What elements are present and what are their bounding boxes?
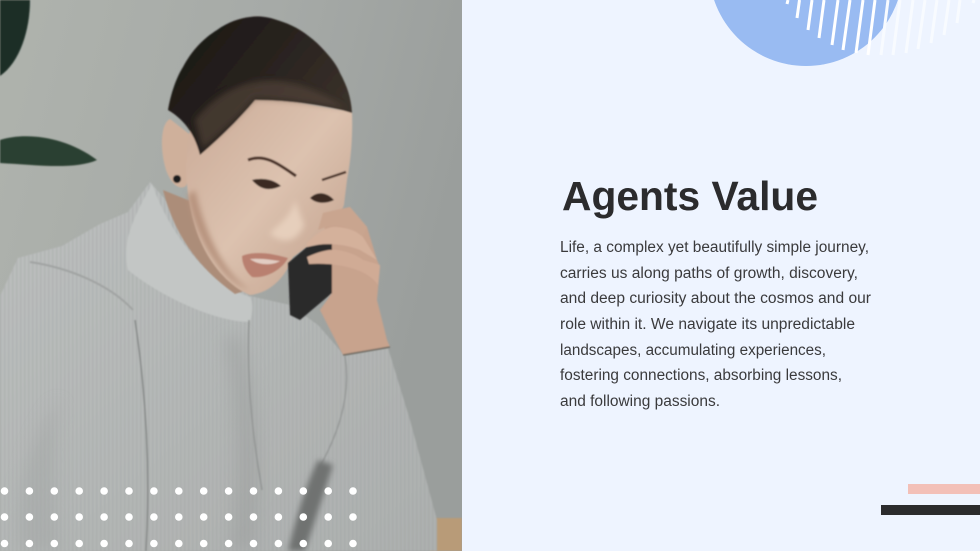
cheek shading — [188, 190, 250, 290]
body text — [560, 239, 871, 410]
eyes — [252, 179, 281, 189]
ear — [162, 119, 190, 188]
phone — [288, 242, 332, 320]
body text: Life, a complex yet beautifully simple journey, — [560, 239, 869, 256]
sweater fold shadows — [288, 460, 333, 551]
hair — [168, 16, 352, 155]
right background panel — [462, 0, 980, 551]
hand and phone — [288, 207, 390, 355]
hair highlight — [195, 80, 345, 148]
decorative blue circle with stripes — [709, 0, 974, 66]
plant leaves — [0, 0, 97, 166]
head — [162, 16, 352, 295]
sweater — [0, 182, 437, 551]
table corner — [430, 518, 462, 551]
hand — [320, 226, 390, 355]
turtleneck collar — [126, 184, 252, 322]
body text: carries us along paths of growth, discovery, — [560, 265, 858, 282]
body text: role within it. We navigate its unpredictable — [560, 316, 855, 333]
dot pattern over photo — [1, 487, 357, 547]
accent bar: dark — [881, 505, 980, 515]
lips — [242, 253, 288, 277]
body text: and deep curiosity about the cosmos and our — [560, 290, 871, 307]
body text: and following passions. — [560, 393, 720, 410]
neck — [162, 190, 242, 294]
body text: fostering connections, absorbing lessons, — [560, 367, 842, 384]
eyebrows — [248, 158, 296, 176]
face — [186, 95, 352, 295]
accent bar: pink — [908, 484, 980, 494]
title: Agents Value — [562, 173, 818, 219]
photo: woman on the phone — [0, 0, 462, 551]
fingers — [307, 227, 377, 260]
body text: landscapes, accumulating experiences, — [560, 342, 826, 359]
nose highlight — [270, 200, 304, 240]
